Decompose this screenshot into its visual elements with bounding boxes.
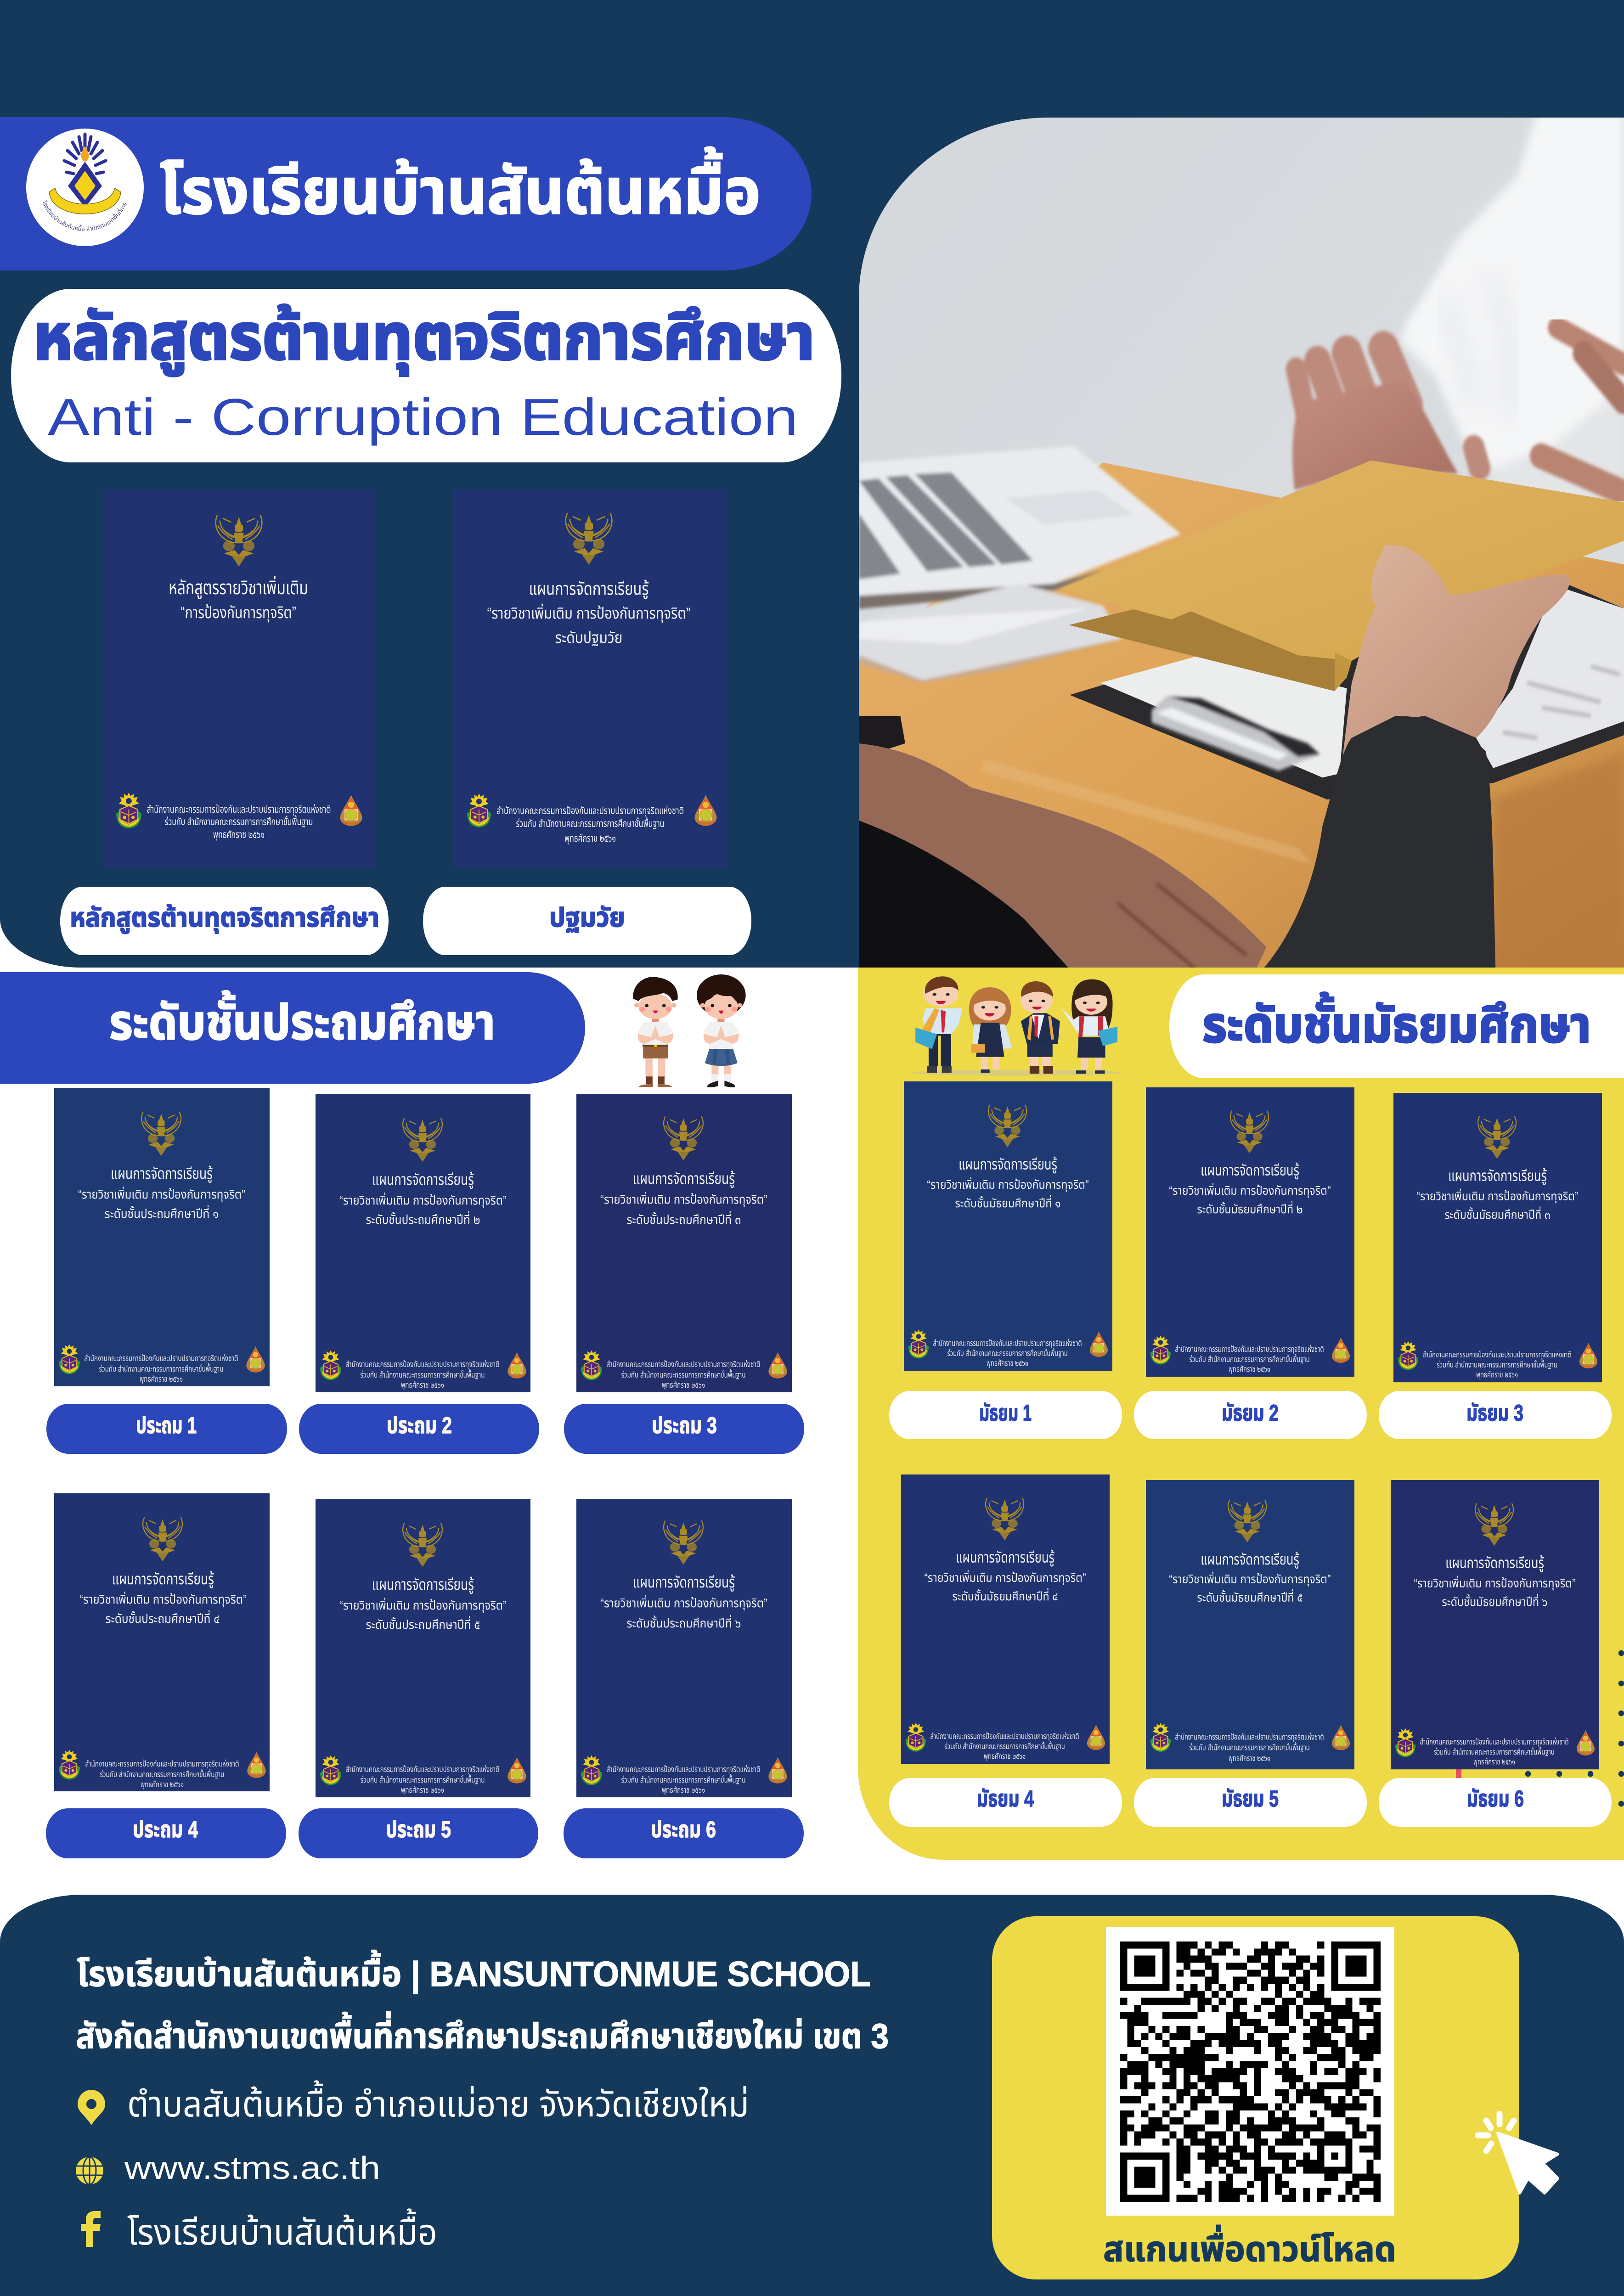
panel: school name banner [0, 0, 812, 270]
book cover: curriculum: สำนักงานคณะกรรมการป้องกันและปราบปรามการทุจริตแห่งชาติ [147, 804, 331, 816]
book cover: secondary 6: “รายวิชาเพิ่มเติม การป้องกันการทุจริต” [1414, 1576, 1576, 1590]
button: primary 1: ประถม 1 [136, 1412, 197, 1438]
book cover: primary 3: “รายวิชาเพิ่มเติม การป้องกันการทุจริต” [600, 1192, 767, 1207]
website: www.stms.ac.th [124, 2150, 380, 2186]
button: primary 6: ประถม 6 [651, 1817, 716, 1842]
book cover: primary 4: สำนักงานคณะกรรมการป้องกันและปราบปรามการทุจริตแห่งชาติ [85, 1759, 239, 1769]
pill background [11, 289, 841, 462]
button: curriculum: หลักสูตรต้านทุตจริตการศึกษา [70, 903, 379, 934]
book cover: secondary 2 [1146, 1087, 1354, 1377]
book cover: secondary 1: พุทธศักราช ๒๕๖๑ [987, 1359, 1028, 1368]
heading: primary level: ระดับชั้นประถมศึกษา [109, 990, 495, 1050]
button: primary 1 [46, 1404, 287, 1454]
girl student [697, 974, 746, 1087]
book cover: primary 3 [576, 1094, 792, 1392]
book cover: curriculum: พุทธศักราช ๒๕๖๑ [213, 829, 265, 841]
book cover: primary 1: ร่วมกับ สำนักงานคณะกรรมการการศึกษาขั้นพื้นฐาน [99, 1363, 223, 1373]
book cover: primary 5: “รายวิชาเพิ่มเติม การป้องกันการทุจริต” [339, 1598, 507, 1613]
button: early childhood [423, 887, 751, 955]
book cover: primary 4: แผนการจัดการเรียนรู้ [112, 1570, 214, 1588]
book cover: primary 5 [316, 1499, 530, 1797]
button: secondary 6 [1379, 1778, 1612, 1827]
heading: secondary level: ระดับชั้นมัธยมศึกษา [1202, 992, 1591, 1052]
button: secondary 5: มัธยม 5 [1222, 1786, 1279, 1812]
button: secondary 6: มัธยม 6 [1467, 1786, 1524, 1812]
book cover: primary 5: ร่วมกับ สำนักงานคณะกรรมการการศึกษาขั้นพื้นฐาน [360, 1774, 485, 1784]
book cover: secondary 2: พุทธศักราช ๒๕๖๑ [1229, 1365, 1270, 1374]
book cover: primary 1 [54, 1088, 270, 1386]
book cover: primary 5: แผนการจัดการเรียนรู้ [372, 1576, 474, 1594]
book cover: secondary 3: ระดับชั้นมัธยมศึกษาปีที่ ๓ [1444, 1206, 1551, 1221]
book cover: primary 2: “รายวิชาเพิ่มเติม การป้องกันการทุจริต” [339, 1193, 507, 1208]
facebook page name: โรงเรียนบ้านสันต้นหมื้อ [127, 2208, 437, 2252]
book cover: primary 3: ระดับชั้นประถมศึกษาปีที่ ๓ [626, 1211, 741, 1227]
book cover: primary 3: สำนักงานคณะกรรมการป้องกันและปราบปรามการทุจริตแห่งชาติ [606, 1360, 761, 1369]
student 3 [1021, 981, 1060, 1074]
book cover: secondary 2: ร่วมกับ สำนักงานคณะกรรมการการศึกษาขั้นพื้นฐาน [1189, 1354, 1310, 1364]
book cover: early childhood plan: ระดับปฐมวัย [555, 629, 623, 647]
book cover: early childhood plan: “รายวิชาเพิ่มเติม การป้องกันการทุจริต” [487, 603, 691, 623]
QR caption: สแกนเพื่อดาวน์โหลด [1103, 2225, 1396, 2269]
button: early childhood: ปฐมวัย [549, 903, 625, 933]
footer school name: โรงเรียนบ้านสันต้นหมื้อ | BANSUNTONMUE SCHOOL [77, 1950, 871, 1994]
button: primary 5: ประถม 5 [386, 1817, 451, 1842]
boy student [633, 977, 678, 1087]
button: secondary 1: มัธยม 1 [979, 1400, 1032, 1426]
button: primary 3 [564, 1404, 804, 1454]
button: primary 4 [46, 1808, 286, 1858]
book cover: primary 6: แผนการจัดการเรียนรู้ [633, 1574, 735, 1592]
book cover: primary 3: แผนการจัดการเรียนรู้ [633, 1170, 735, 1188]
book cover: secondary 3: ร่วมกับ สำนักงานคณะกรรมการการศึกษาขั้นพื้นฐาน [1437, 1359, 1557, 1369]
book cover: curriculum: “การป้องกันการทุจริต” [180, 603, 296, 622]
heading: secondary level [1169, 974, 1624, 1078]
book cover: early childhood plan: สำนักงานคณะกรรมการป้องกันและปราบปรามการทุจริตแห่งชาติ [496, 805, 684, 817]
book cover: secondary 5 [1146, 1480, 1354, 1769]
book cover: primary 1: แผนการจัดการเรียนรู้ [111, 1165, 213, 1183]
button: primary 4: ประถม 4 [133, 1817, 198, 1842]
book cover: secondary 1: ร่วมกับ สำนักงานคณะกรรมการการศึกษาขั้นพื้นฐาน [947, 1348, 1068, 1358]
book cover: secondary 5: พุทธศักราช ๒๕๖๑ [1229, 1754, 1270, 1763]
heading: primary level [0, 972, 585, 1084]
book cover: curriculum: ร่วมกับ สำนักงานคณะกรรมการการศึกษาขั้นพื้นฐาน [164, 815, 313, 827]
button: primary 2: ประถม 2 [387, 1412, 452, 1438]
panel: footer [0, 1895, 1624, 2296]
book cover: primary 5: สำนักงานคณะกรรมการป้องกันและปราบปรามการทุจริตแห่งชาติ [345, 1765, 500, 1774]
book cover: secondary 5: ระดับชั้นมัธยมศึกษาปีที่ ๕ [1197, 1589, 1303, 1604]
icon: facebook [81, 2211, 101, 2247]
English course title: Anti - Corruption Education [48, 388, 798, 446]
address: ตำบลสันต้นหมื้อ อำเภอแม่อาย จังหวัดเชียงใหม่ [127, 2080, 749, 2124]
panel: navy header [0, 0, 1624, 968]
book cover: primary 5: พุทธศักราช ๒๕๖๑ [401, 1785, 444, 1795]
footer affiliation: สังกัดสำนักงานเขตพื้นที่การศึกษาประถมศึกษาเชียงใหม่ เขต 3 [76, 2012, 889, 2056]
book cover: curriculum: หลักสูตรรายวิชาเพิ่มเติม [169, 575, 308, 599]
book cover: secondary 1: ระดับชั้นมัธยมศึกษาปีที่ ๑ [955, 1195, 1061, 1210]
book cover: secondary 4: ร่วมกับ สำนักงานคณะกรรมการการศึกษาขั้นพื้นฐาน [944, 1741, 1065, 1751]
book cover: secondary 6: สำนักงานคณะกรรมการป้องกันและปราบปรามการทุจริตแห่งชาติ [1420, 1737, 1569, 1747]
book cover: secondary 6: พุทธศักราช ๒๕๖๑ [1473, 1757, 1515, 1767]
QR code [1120, 1941, 1381, 2202]
book cover: primary 4: ร่วมกับ สำนักงานคณะกรรมการการศึกษาขั้นพื้นฐาน [100, 1768, 224, 1779]
button: secondary 5 [1134, 1778, 1367, 1827]
book cover: primary 1: “รายวิชาเพิ่มเติม การป้องกันการทุจริต” [78, 1187, 245, 1202]
book cover: secondary 2: สำนักงานคณะกรรมการป้องกันและปราบปรามการทุจริตแห่งชาติ [1175, 1345, 1324, 1354]
illustration: secondary students [911, 976, 1121, 1075]
banner title: โรงเรียนบ้านสันต้นหมื้อ [160, 146, 761, 227]
book cover: secondary 3: แผนการจัดการเรียนรู้ [1448, 1167, 1547, 1185]
icon: location pin [78, 2090, 105, 2125]
book cover: secondary 1 [904, 1081, 1112, 1371]
book cover: secondary 2: “รายวิชาเพิ่มเติม การป้องกันการทุจริต” [1169, 1183, 1331, 1198]
book cover: primary 3: พุทธศักราช ๒๕๖๑ [662, 1380, 705, 1390]
book cover: secondary 4: ระดับชั้นมัธยมศึกษาปีที่ ๔ [952, 1588, 1058, 1603]
book cover: primary 6: “รายวิชาเพิ่มเติม การป้องกันการทุจริต” [600, 1595, 767, 1610]
book cover: secondary 1: “รายวิชาเพิ่มเติม การป้องกันการทุจริต” [927, 1177, 1089, 1192]
book cover: secondary 3: “รายวิชาเพิ่มเติม การป้องกันการทุจริต” [1416, 1188, 1579, 1203]
book cover: primary 1: พุทธศักราช ๒๕๖๑ [140, 1374, 183, 1384]
book cover: primary 1: สำนักงานคณะกรรมการป้องกันและปราบปรามการทุจริตแห่งชาติ [85, 1354, 238, 1363]
book cover: primary 3: ร่วมกับ สำนักงานคณะกรรมการการศึกษาขั้นพื้นฐาน [621, 1369, 746, 1379]
book cover: early childhood plan: แผนการจัดการเรียนรู้ [529, 580, 648, 599]
book cover: secondary 4: “รายวิชาเพิ่มเติม การป้องกันการทุจริต” [924, 1570, 1086, 1585]
QR backing [1106, 1927, 1394, 2216]
book cover: primary 2: ร่วมกับ สำนักงานคณะกรรมการการศึกษาขั้นพื้นฐาน [360, 1369, 485, 1379]
book cover: secondary 1: สำนักงานคณะกรรมการป้องกันและปราบปรามการทุจริตแห่งชาติ [933, 1339, 1082, 1348]
book cover: primary 4: ระดับชั้นประถมศึกษาปีที่ ๔ [106, 1610, 220, 1626]
button: curriculum [60, 887, 389, 955]
book cover: primary 2: สำนักงานคณะกรรมการป้องกันและปราบปรามการทุจริตแห่งชาติ [345, 1360, 500, 1369]
book cover: primary 2: แผนการจัดการเรียนรู้ [372, 1171, 474, 1189]
button: secondary 4: มัธยม 4 [977, 1786, 1034, 1812]
QR panel background [992, 1916, 1519, 2279]
book cover: early childhood plan: พุทธศักราช ๒๕๖๑ [564, 833, 616, 844]
book cover: secondary 2: ระดับชั้นมัธยมศึกษาปีที่ ๒ [1197, 1201, 1303, 1216]
book cover: secondary 1: แผนการจัดการเรียนรู้ [959, 1156, 1057, 1174]
book cover: secondary 6: แผนการจัดการเรียนรู้ [1445, 1554, 1544, 1572]
panel: QR code download [992, 1916, 1519, 2279]
student 2 [969, 987, 1012, 1073]
student 4 [1061, 979, 1117, 1074]
book cover: primary 2: พุทธศักราช ๒๕๖๑ [401, 1380, 444, 1390]
footer background [0, 1895, 1624, 2296]
illustration: primary students greeting [633, 974, 746, 1087]
book cover: secondary 6: ระดับชั้นมัธยมศึกษาปีที่ ๖ [1442, 1593, 1548, 1609]
student 1 [915, 976, 962, 1073]
button: primary 5 [299, 1808, 538, 1858]
book cover: secondary 3 [1393, 1093, 1602, 1382]
book cover: primary 1: ระดับชั้นประถมศึกษาปีที่ ๑ [105, 1205, 219, 1221]
book cover: secondary 4: พุทธศักราช ๒๕๖๑ [984, 1752, 1026, 1761]
book cover: secondary 5: “รายวิชาเพิ่มเติม การป้องกันการทุจริต” [1169, 1571, 1331, 1587]
book cover: secondary 4 [901, 1474, 1110, 1764]
button: secondary 2 [1134, 1391, 1367, 1439]
book cover: curriculum [103, 489, 376, 867]
button: secondary 1 [889, 1391, 1122, 1439]
book cover: primary 6 [576, 1499, 792, 1797]
book cover: secondary 5: ร่วมกับ สำนักงานคณะกรรมการการศึกษาขั้นพื้นฐาน [1189, 1742, 1310, 1752]
book cover: primary 6: ร่วมกับ สำนักงานคณะกรรมการการศึกษาขั้นพื้นฐาน [621, 1774, 746, 1784]
button: primary 2 [299, 1404, 539, 1454]
book cover: primary 2: ระดับชั้นประถมศึกษาปีที่ ๒ [366, 1211, 480, 1227]
photo: envelope being handed over a desk [859, 110, 1624, 974]
book cover: secondary 3: สำนักงานคณะกรรมการป้องกันและปราบปรามการทุจริตแห่งชาติ [1422, 1350, 1572, 1360]
book cover: early childhood plan: ร่วมกับ สำนักงานคณะกรรมการการศึกษาขั้นพื้นฐาน [516, 816, 664, 829]
Thai course title: หลักสูตรต้านทุตจริตการศึกษา [33, 301, 815, 376]
panel: course title pill [11, 289, 841, 462]
book cover: primary 6: สำนักงานคณะกรรมการป้องกันและปราบปรามการทุจริตแห่งชาติ [606, 1765, 761, 1774]
decorative dot grid and red bar [1456, 1650, 1624, 1806]
book cover: primary 4 [54, 1493, 270, 1791]
button: secondary 3: มัธยม 3 [1466, 1400, 1523, 1426]
book cover: secondary 5: สำนักงานคณะกรรมการป้องกันและปราบปรามการทุจริตแห่งชาติ [1175, 1732, 1324, 1742]
icon: globe [76, 2157, 103, 2184]
book cover: secondary 6: ร่วมกับ สำนักงานคณะกรรมการการศึกษาขั้นพื้นฐาน [1434, 1746, 1555, 1756]
book cover: primary 6: ระดับชั้นประถมศึกษาปีที่ ๖ [626, 1615, 741, 1630]
book cover: secondary 3: พุทธศักราช ๒๕๖๑ [1476, 1370, 1518, 1380]
book cover: secondary 4: แผนการจัดการเรียนรู้ [956, 1549, 1054, 1567]
book cover: secondary 5: แผนการจัดการเรียนรู้ [1201, 1551, 1299, 1569]
icon: click cursor [1478, 2114, 1558, 2193]
button: primary 3: ประถม 3 [652, 1412, 717, 1438]
book cover: early childhood plan [453, 489, 727, 867]
book cover: primary 2 [316, 1094, 530, 1392]
button: primary 6 [564, 1808, 804, 1858]
book cover: secondary 4: สำนักงานคณะกรรมการป้องกันและปราบปรามการทุจริตแห่งชาติ [930, 1732, 1079, 1741]
book cover: primary 6: พุทธศักราช ๒๕๖๑ [662, 1785, 705, 1795]
button: secondary 2: มัธยม 2 [1222, 1400, 1279, 1426]
button: secondary 4 [889, 1778, 1122, 1827]
book cover: primary 4: “รายวิชาเพิ่มเติม การป้องกันการทุจริต” [79, 1592, 247, 1607]
button: secondary 3 [1379, 1391, 1612, 1439]
book cover: primary 5: ระดับชั้นประถมศึกษาปีที่ ๕ [366, 1616, 480, 1632]
panel: secondary level yellow background [858, 968, 1624, 1860]
book cover: secondary 6 [1391, 1480, 1599, 1769]
book cover: secondary 2: แผนการจัดการเรียนรู้ [1201, 1162, 1299, 1180]
banner background [0, 117, 812, 270]
book cover: primary 4: พุทธศักราช ๒๕๖๑ [141, 1780, 184, 1790]
